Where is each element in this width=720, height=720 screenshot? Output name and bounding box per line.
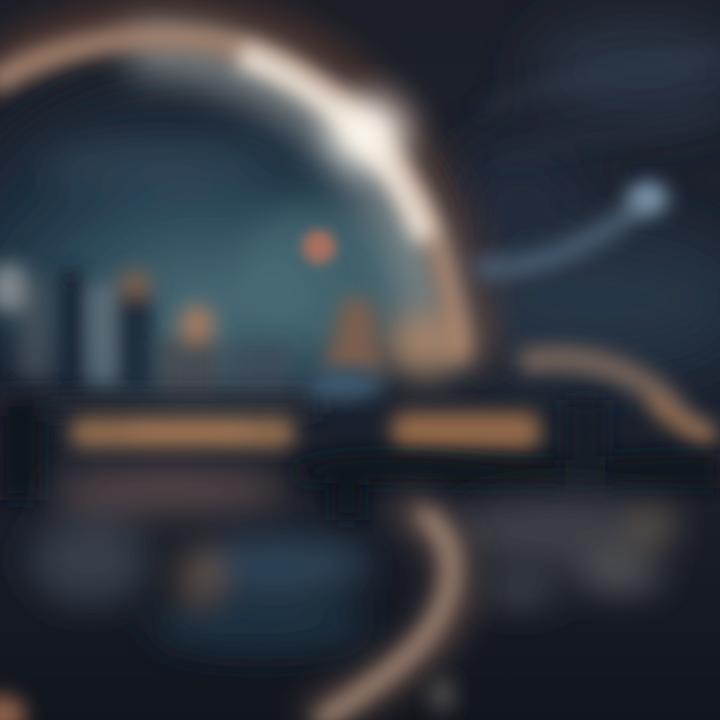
inner sky disc: [0, 70, 450, 410]
city skyline: [0, 265, 385, 400]
reflection: lower right speckles: [450, 498, 677, 606]
lower arc glow: [310, 505, 456, 720]
bridge silhouette: [285, 400, 720, 520]
orange horizon band left: [70, 418, 295, 448]
reflection: lower left warm patches: [30, 468, 370, 651]
arc: outer orange glow: [0, 13, 482, 365]
arc: highlight: [330, 98, 406, 166]
bottom small glow: [428, 677, 456, 713]
city base darkness: [0, 392, 320, 500]
lower arc bright core: [318, 512, 451, 720]
bottom left corner glow: [0, 695, 26, 720]
arc: wide inner fade: [130, 50, 427, 360]
floating orb: [302, 230, 336, 264]
arc: bright core: [240, 55, 425, 240]
right swirl: bright point: [628, 182, 668, 214]
right faint streaks: [480, 55, 720, 160]
orange horizon band right: [392, 412, 540, 450]
right tan ribbon: [520, 359, 715, 438]
arc: warm body: [0, 37, 458, 360]
blue mid structure: [305, 371, 385, 399]
right swirl: blue glow: [475, 198, 650, 268]
right sky haze: [450, 20, 720, 370]
arc: lower warm end: [383, 315, 467, 375]
